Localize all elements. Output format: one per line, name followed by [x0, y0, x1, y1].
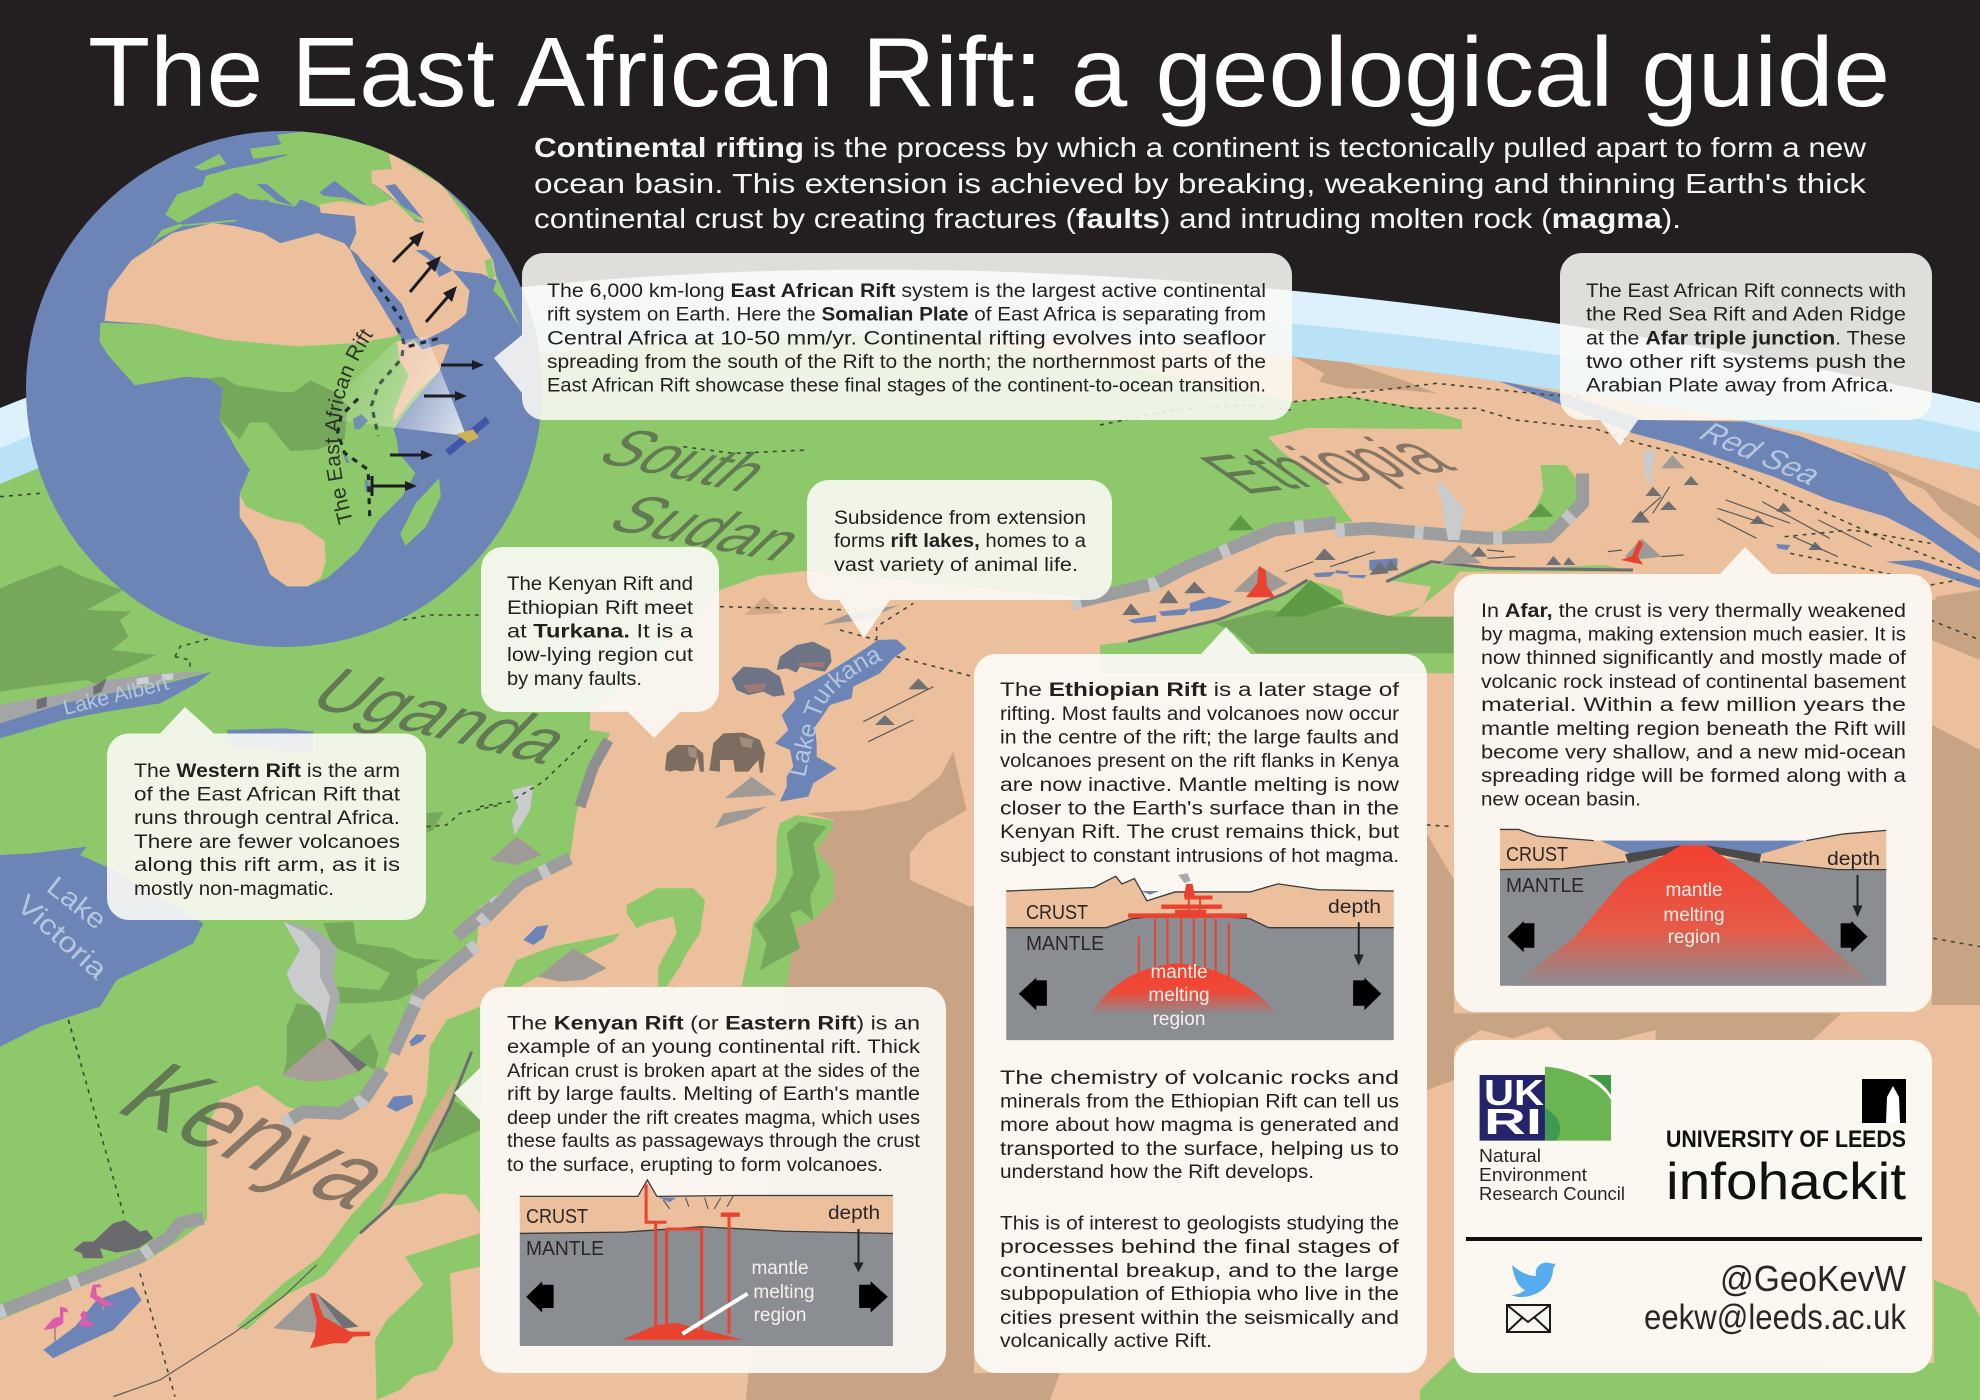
map: rift lakes: [1128, 544, 1790, 623]
map: green crescent: [1504, 465, 1576, 532]
panel: Kenyan Rift: [454, 987, 946, 1373]
panel: Ethiopian Rift: subpopulation of Ethiopia who live in the: [1000, 1284, 1399, 1305]
logo: infohackit: infohackit: [1666, 1153, 1907, 1211]
intro text: Continental rifting is the process by which a continent is tectonically pulled apart to form a new: [534, 132, 1867, 163]
panel: Ethiopian Rift: minerals from the Ethiopian Rift can tell us: [1000, 1092, 1399, 1112]
map: volcano with lava flow: [273, 1293, 370, 1348]
diagram: Afar cross-section: depth: [1827, 849, 1880, 870]
diagram: Kenyan rift cross-section: MANTLE: [526, 1238, 604, 1260]
panel: Ethiopian Rift: volcanically active Rift.: [1000, 1331, 1212, 1352]
globe: satellite: [445, 416, 490, 456]
panel: Ethiopian Rift: subject to constant intrusions of hot magma.: [1000, 846, 1399, 867]
panel: Ethiopian Rift: [974, 627, 1427, 1373]
map: country name South: South: [583, 417, 788, 503]
panel: Ethiopian Rift: This is of interest to geologists studying the: [1000, 1214, 1399, 1234]
panel: Afar triple junction: Arabian Plate away from Africa.: [1586, 376, 1894, 396]
logo: UKRI NERC: [1479, 1067, 1625, 1204]
map: borders near Turkana: [480, 603, 973, 807]
map: erupting volcano, Ethiopia: [1234, 566, 1288, 597]
map: country name Ethiopia: Ethiopia: [1179, 423, 1475, 505]
globe: Arabia and Asia: [319, 152, 497, 341]
panel: East African Rift system: The 6,000 km-long East African Rift system is the largest active continental: [547, 281, 1266, 302]
panel: Afar triple junction: at the Afar triple junction . These: [1586, 328, 1906, 350]
panel: Western Rift: mostly non-magmatic.: [134, 879, 334, 900]
panel: Afar: [1454, 547, 1932, 1012]
panel: Turkana: Ethiopian Rift meet: [507, 598, 694, 619]
map: borders in the west and north: [0, 447, 1980, 1060]
map: Turkana basin features: [480, 597, 973, 987]
globe: rift dashes: [338, 277, 442, 520]
logo: University of Leeds: UNIVERSITY OF LEEDS: [1666, 1126, 1906, 1153]
panel: Ethiopian Rift: more about how magma is generated and: [1000, 1115, 1399, 1136]
panel: East African Rift system: rift system on Earth. Here the Somalian Plate of East Africa is separating from: [547, 304, 1266, 326]
map: lake label Turkana: Lake Turkana: [788, 650, 882, 776]
globe: magnified region fan: [338, 336, 466, 436]
map: small lakes: [387, 1034, 427, 1112]
map: volcanoes near Turkana: [490, 597, 933, 865]
panel: Turkana: by many faults.: [507, 669, 642, 690]
map: smoke plumes: [1437, 450, 1656, 540]
panel: Turkana: at Turkana. It is a: [507, 622, 694, 642]
icon: hippos: [732, 642, 832, 697]
logo: UKRI NERC: UK: [1484, 1072, 1544, 1113]
diagram: Kenyan rift cross-section: region: [754, 1305, 806, 1326]
map: Lake Albert: [0, 672, 212, 738]
map: Red Sea: [1498, 381, 1980, 599]
map: volcanic smoke plume: [283, 922, 340, 1040]
panel: Kenyan Rift: these faults as passageways through the crust: [507, 1131, 921, 1152]
map: lake label Lake: Lake: [41, 870, 112, 935]
diagram: Afar cross-section: MANTLE: [1506, 875, 1584, 897]
map: lake label Albert: Lake Albert: [61, 671, 171, 720]
diagram: Kenyan rift cross-section: [520, 1180, 893, 1346]
panel: Kenyan Rift: deep under the rift creates magma, which uses: [507, 1108, 920, 1129]
map: country name Uganda: Uganda: [293, 656, 591, 777]
globe showing Africa: [26, 131, 542, 647]
map: borders in Ethiopia and Afar: [1100, 383, 1980, 640]
map: borders in Kenya: [68, 1020, 175, 1397]
title: The East African Rift: a geological guide: [88, 17, 1890, 127]
panel: rift lakes: [807, 480, 1112, 638]
panel: Turkana: [481, 547, 719, 738]
map: rift wall at Turkana: [480, 740, 608, 923]
intro text: ocean basin. This extension is achieved by breaking, weakening and thinning Earth's thick: [534, 168, 1867, 199]
map: volcanoes along the Ethiopian rift and Afar: [1122, 455, 1823, 615]
panel: Ethiopian Rift: Kenyan Rift. The crust remains thick, but: [1000, 822, 1400, 843]
panel: logos and contact: [1454, 1040, 1932, 1373]
panel: Kenyan Rift: The Kenyan Rift (or Eastern Rift ) is an: [507, 1014, 920, 1034]
panel: Afar triple junction: the Red Sea Rift and Aden Ridge: [1586, 304, 1906, 326]
globe: Europe: [165, 128, 426, 223]
panel: Ethiopian Rift: The chemistry of volcanic rocks and: [1000, 1068, 1399, 1089]
panel: Ethiopian Rift: rifting. Most faults and volcanoes now occur: [1000, 704, 1400, 725]
map: rift wall: [0, 1218, 203, 1313]
panel: Turkana: The Kenyan Rift and: [507, 574, 693, 595]
diagram: Ethiopian rift cross-section: MANTLE: [1026, 933, 1104, 955]
panel: Afar: material. Within a few million years the: [1481, 695, 1906, 716]
globe: curved label: The East African Rift: [325, 328, 374, 525]
map: green and forested strip: [503, 815, 835, 987]
logo: UKRI NERC: Environment: [1479, 1165, 1587, 1185]
panel: Afar triple junction: [1560, 253, 1932, 446]
map: dark forest by volcano: [283, 812, 443, 1080]
panel: Ethiopian Rift: The Ethiopian Rift is a later stage of: [1000, 680, 1400, 701]
panel: Afar triple junction: two other rift systems push the: [1586, 352, 1906, 373]
globe: Mediterranean and Black Sea: [179, 192, 318, 225]
icon: twitter bird: [1511, 1263, 1556, 1297]
panel: Ethiopian Rift: in the centre of the rift; the large faults and: [1000, 728, 1399, 748]
map: label Red Sea: Red Sea: [1694, 416, 1827, 491]
diagram: Ethiopian rift cross-section: CRUST: [1026, 902, 1088, 924]
map: southern Ethiopian highlands: [1100, 562, 1633, 673]
diagram: Afar cross-section: mantle: [1665, 880, 1723, 901]
intro text: continental crust by creating fractures ( faults ) and intruding molten rock ( magma ).: [534, 203, 1681, 234]
panel: Turkana: low-lying region cut: [507, 645, 694, 666]
icon: elephants: [665, 733, 765, 773]
panel: Afar: by magma, making extension much easier. It is: [1481, 624, 1906, 646]
panel: Ethiopian Rift: processes behind the final stages of: [1000, 1237, 1400, 1258]
panel: Ethiopian Rift: understand how the Rift develops.: [1000, 1162, 1314, 1183]
logo: University of Leeds: [1666, 1079, 1906, 1153]
panel: Ethiopian Rift: volcanoes present on the rift flanks in Kenya: [1000, 751, 1399, 772]
diagram: Kenyan rift cross-section: mantle: [751, 1258, 809, 1279]
panel: Western Rift: along this rift arm, as it is: [134, 855, 400, 876]
diagram: Ethiopian rift cross-section: [1006, 873, 1394, 1040]
map: Kenya south-west detail: [0, 1007, 483, 1400]
map: dark mountain: [73, 1220, 153, 1258]
panel: Afar: mantle melting region beneath the Rift will: [1481, 719, 1906, 740]
panel: Kenyan Rift: rift by large faults. Melting of Earth's mantle: [507, 1084, 920, 1105]
panel: rift lakes: Subsidence from extension: [834, 508, 1086, 529]
panel: Western Rift: [107, 707, 426, 920]
panel: Kenyan Rift: example of an young continental rift. Thick: [507, 1037, 921, 1058]
diagram: Afar cross-section: region: [1668, 927, 1720, 948]
contact: email: eekw@leeds.ac.uk: [1644, 1298, 1906, 1337]
panel: East African Rift system: [494, 253, 1292, 420]
globe: Madagascar: [400, 478, 441, 546]
panel: Ethiopian Rift: transported to the surface, helping us to: [1000, 1139, 1399, 1160]
icon: flamingos: [43, 1284, 115, 1342]
panel: Ethiopian Rift: cities present within the seismically and: [1000, 1308, 1399, 1329]
atmosphere bands: [0, 270, 1980, 600]
contact: twitter handle: @GeoKevW: [1720, 1258, 1906, 1299]
diagram: Afar cross-section: CRUST: [1506, 844, 1568, 866]
globe: rift lakes: [343, 414, 369, 492]
panel: Ethiopian Rift: are now inactive. Mantle melting is now: [1000, 775, 1399, 796]
intro text: [534, 132, 1867, 234]
logo: UKRI NERC: Natural: [1479, 1146, 1541, 1166]
map: Lake Turkana: [775, 639, 907, 802]
map: lake label Victoria: Victoria: [11, 888, 114, 985]
logo: UKRI NERC: Research Council: [1479, 1184, 1625, 1204]
panel: rift lakes: vast variety of animal life.: [834, 555, 1078, 576]
panel: Western Rift: There are fewer volcanoes: [134, 832, 400, 853]
panel: Western Rift: of the East African Rift that: [134, 784, 401, 806]
diagram: Kenyan rift cross-section: CRUST: [526, 1206, 588, 1228]
panel: Kenyan Rift: African crust is broken apart at the sides of the: [507, 1061, 920, 1082]
divider line: [1466, 1237, 1922, 1241]
panel: Kenyan Rift: to the surface, erupting to form volcanoes.: [507, 1155, 883, 1176]
map: Ethiopia and Afar features: [1072, 357, 1980, 673]
map: dark forest, south-west: [0, 565, 500, 1080]
panel: Ethiopian Rift: closer to the Earth's surface than in the: [1000, 798, 1399, 820]
panel: Afar: now thinned significantly and mostly made of: [1481, 648, 1907, 669]
panel: rift lakes: forms rift lakes, homes to a: [834, 531, 1086, 552]
panel: East African Rift system: Central Africa at 10-50 mm/yr. Continental rifting evolves into seafloor: [547, 328, 1267, 350]
map: erupting volcano, Afar: [1621, 538, 1661, 565]
globe: Red Sea and Aden: [350, 248, 415, 345]
globe: plate motion arrows: [372, 231, 484, 496]
panel: Afar: new ocean basin.: [1481, 790, 1641, 810]
diagram: Kenyan rift cross-section: depth: [828, 1203, 880, 1224]
map: green strip and patches: [237, 1007, 483, 1400]
diagram: Afar cross-section: melting: [1663, 905, 1725, 926]
globe: Africa: [99, 323, 449, 586]
map: country name Sudan: Sudan: [593, 483, 822, 572]
diagram: Ethiopian rift cross-section: mantle: [1150, 962, 1208, 983]
panel: Afar: spreading ridge will be formed along with a: [1481, 766, 1906, 787]
map: Lake Victoria: [0, 847, 203, 1047]
diagram: Kenyan rift cross-section: melting: [753, 1282, 815, 1303]
panel: Western Rift: The Western Rift is the arm: [134, 761, 400, 782]
map: Ethiopian rift walls: [1072, 473, 1583, 603]
panel: Afar: volcanic rock instead of continental basement: [1481, 672, 1907, 693]
map: large volcano: [282, 1038, 367, 1082]
diagram: Ethiopian rift cross-section: melting: [1148, 985, 1210, 1006]
icon: mail envelope: [1507, 1305, 1550, 1332]
panel: Afar triple junction: The East African Rift connects with: [1586, 281, 1906, 302]
map: brown patch at the horizon: [1294, 357, 1437, 393]
globe: Asia rim: [388, 152, 520, 328]
logo: UKRI NERC: RI: [1484, 1101, 1542, 1142]
panel: Afar: In Afar, the crust is very thermally weakened: [1481, 601, 1906, 622]
panel: East African Rift system: spreading from the south of the Rift to the north; the northernmost parts of the: [547, 352, 1266, 373]
diagram: Ethiopian rift cross-section: region: [1153, 1009, 1205, 1030]
map: country name Kenya: Kenya: [95, 1045, 421, 1226]
map: dark highland areas: [746, 590, 1980, 1400]
panel: Afar: become very shallow, and a new mid-ocean: [1481, 742, 1906, 764]
map: fault lines: [1285, 487, 1872, 572]
panel: Ethiopian Rift: continental breakup, and to the large: [1000, 1261, 1399, 1282]
diagram: Ethiopian rift cross-section: depth: [1328, 897, 1381, 918]
panel: Western Rift: runs through central Africa.: [134, 808, 400, 829]
panel: East African Rift system: East African Rift showcase these final stages of the continent-to-ocean transition.: [547, 376, 1266, 396]
diagram: Afar cross-section: [1500, 829, 1886, 986]
